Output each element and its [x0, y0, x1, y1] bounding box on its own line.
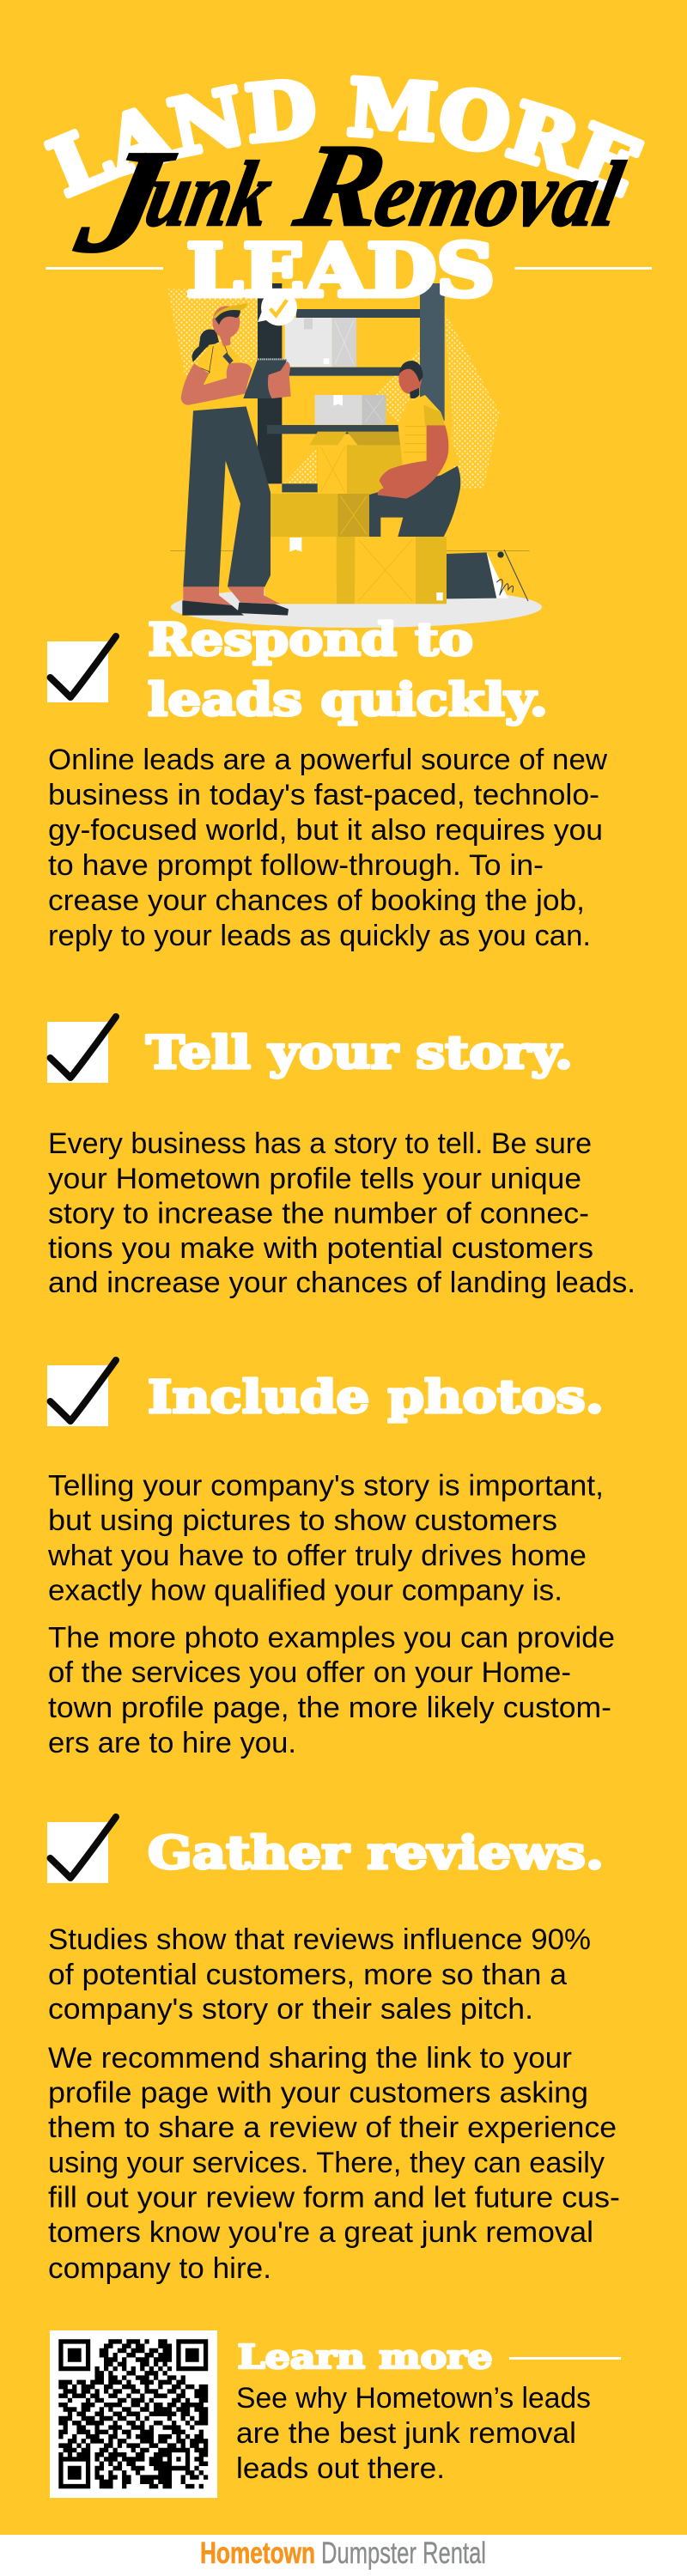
body text: them to share a review of their experience: [48, 2111, 617, 2144]
title line: Junk Removal: emoval: [367, 143, 631, 246]
body text: and increase your chances of landing leads.: [48, 1267, 635, 1299]
woman: [181, 303, 291, 616]
body text: gy-focused world, but it also requires you: [48, 814, 603, 847]
title: [43, 75, 652, 313]
heading: Gather reviews.: [148, 1827, 604, 1880]
open yellow box: [309, 432, 411, 494]
body text: We recommend sharing the link to your: [48, 2042, 572, 2075]
heading: leads quickly.: [148, 674, 548, 726]
dotted background shapes: [167, 289, 500, 488]
panel: learn more: [236, 2337, 621, 2485]
body text: Studies show that reviews influence 90%: [48, 1923, 591, 1956]
body text: [236, 2382, 591, 2485]
heading: [148, 614, 548, 726]
checkbox icon: [47, 1817, 116, 1883]
body text: Telling your company's story is important,: [48, 1470, 604, 1503]
body text: town profile page, the more likely custom-: [48, 1692, 611, 1724]
middle grey box: [315, 395, 386, 425]
bin and paper: [447, 550, 528, 601]
title line: Junk Removal: unk: [138, 143, 280, 246]
panel: include photos: [47, 1360, 615, 1759]
title line: Junk Removal: R: [285, 120, 397, 252]
heading: Respond to: [148, 614, 473, 666]
body text: to have prompt follow-through. To in-: [48, 849, 544, 882]
body text: [47, 1470, 615, 1759]
heading: Tell your story.: [146, 1027, 573, 1079]
speech bubble with check: [258, 289, 297, 325]
floor ellipse: [171, 586, 542, 628]
body text: your Hometown profile tells your unique: [48, 1163, 581, 1195]
body text: profile page with your customers asking: [48, 2076, 588, 2109]
body text: crease your chances of booking the job,: [48, 884, 585, 917]
body text: exactly how qualified your company is.: [48, 1575, 562, 1607]
man: [369, 361, 460, 537]
body text: Every business has a story to tell. Be sure: [48, 1127, 592, 1160]
body text: of the services you offer on your Home-: [48, 1656, 571, 1689]
left rule: [46, 267, 163, 270]
checkbox icon: [47, 1017, 116, 1083]
body text: but using pictures to show customers: [48, 1504, 557, 1537]
shelf: [258, 283, 445, 492]
title line: Junk Removal: J: [66, 119, 185, 283]
body text: ers are to hire you.: [48, 1727, 296, 1759]
checkbox icon: [47, 1360, 116, 1426]
body text: reply to your leads as quickly as you can.: [48, 920, 591, 952]
body text: Online leads are a powerful source of new: [48, 744, 607, 776]
middle yellow box: [269, 494, 369, 537]
title line: LAND MORE: LAND MORE: [43, 75, 645, 199]
footer logo text: Dumpster Rental: [321, 2537, 486, 2570]
bottom yellow box: [264, 537, 447, 604]
body text: [48, 1923, 620, 2285]
footer logo text: Hometown: [200, 2537, 315, 2570]
body text: using your services. There, they can easily: [48, 2147, 605, 2179]
body text: company to hire.: [48, 2252, 271, 2285]
body text: The more photo examples you can provide: [48, 1621, 615, 1654]
right rule: [515, 267, 652, 270]
footer logo text: [200, 2537, 486, 2570]
panel: respond to leads quickly: [47, 614, 607, 952]
title line: LEADS: LEADS: [186, 228, 495, 313]
QR code: [50, 2330, 217, 2498]
checkbox icon: [47, 636, 116, 702]
body text: tomers know you're a great junk removal: [48, 2216, 593, 2249]
body text: what you have to offer truly drives home: [47, 1540, 587, 1572]
body text: business in today's fast-paced, technolo-: [48, 779, 599, 811]
illustration: warehouse workers with boxes: [167, 283, 542, 628]
body text: of potential customers, more so than a: [48, 1959, 567, 1991]
body text: leads out there.: [236, 2452, 445, 2485]
footer: [0, 2535, 687, 2576]
panel: tell your story: [47, 1017, 635, 1299]
heading: Include photos.: [148, 1371, 604, 1424]
body text: company's story or their sales pitch.: [48, 1993, 533, 2026]
heading: Learn more: [237, 2337, 493, 2376]
body text: [48, 1127, 635, 1299]
body text: See why Hometown’s leads: [236, 2382, 591, 2415]
body text: tions you make with potential customers: [48, 1232, 593, 1265]
top grey box: [285, 318, 356, 367]
body text: are the best junk removal: [236, 2417, 576, 2450]
floor line: [170, 550, 530, 551]
body text: fill out your review form and let future cus-: [48, 2181, 620, 2214]
body text: story to increase the number of connec-: [48, 1197, 589, 1230]
rule: [509, 2357, 621, 2360]
panel: gather reviews: [47, 1817, 620, 2285]
body text: [48, 744, 607, 952]
